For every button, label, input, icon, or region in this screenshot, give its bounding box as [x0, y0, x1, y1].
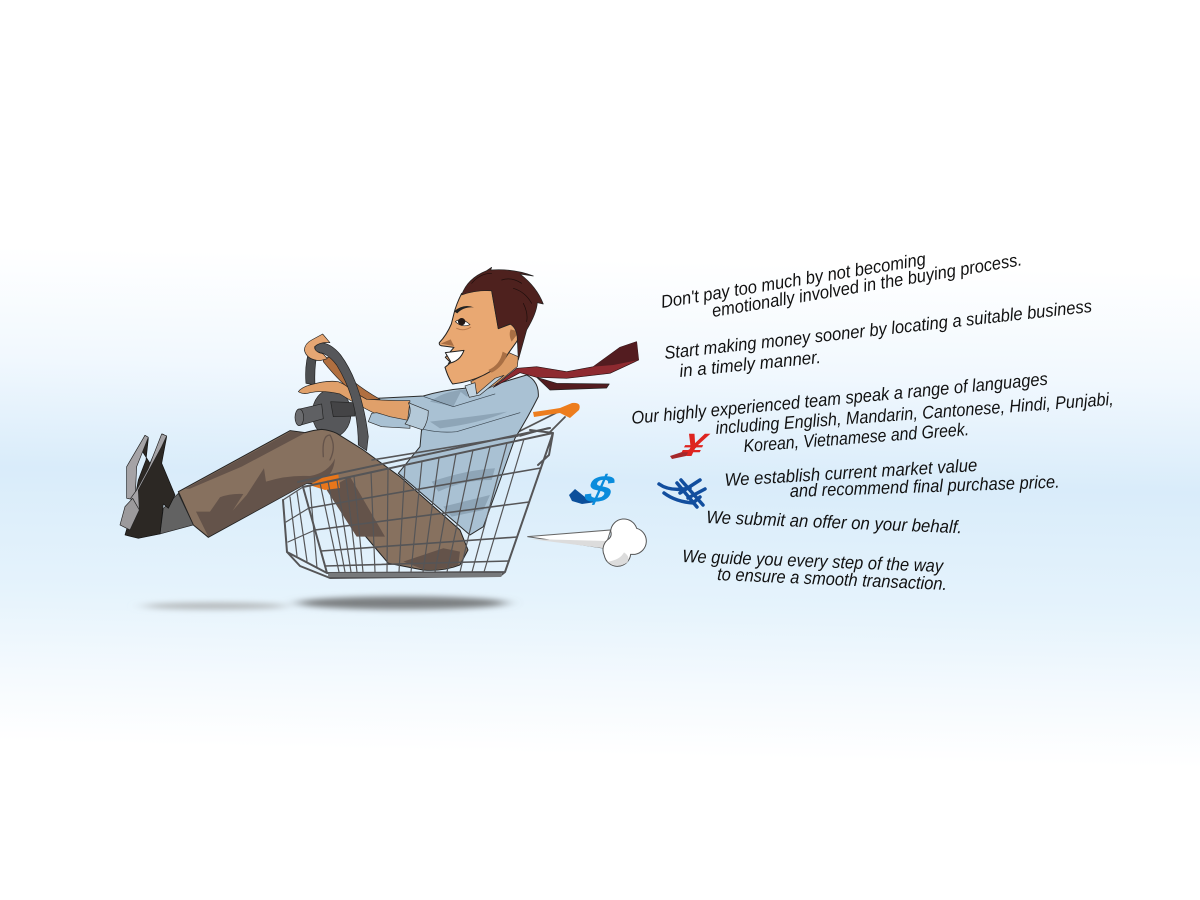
shopping cart basket — [283, 428, 553, 578]
shirt shadows — [423, 387, 520, 517]
text: languages: Our highly experienced team speak a range of languages — [630, 369, 1049, 428]
text: don't pay too much: emotionally involved in the buying process. — [710, 249, 1023, 321]
text: languages — [630, 369, 1114, 456]
neck — [471, 352, 518, 394]
eye and brow — [454, 306, 474, 330]
text: languages: Korean, Vietnamese and Greek. — [743, 419, 970, 456]
shirt cuff — [405, 403, 428, 430]
text: guide you: to ensure a smooth transaction. — [717, 564, 947, 594]
text: start making money: in a timely manner. — [678, 347, 822, 381]
arms and hands — [298, 357, 410, 428]
text: languages: including English, Mandarin, Cantonese, Hindi, Punjabi, — [715, 389, 1114, 438]
exhaust puff — [527, 519, 646, 566]
text: market value: and recommend final purchase price. — [789, 472, 1060, 501]
trousers — [178, 429, 468, 570]
text: start making money: Start making money sooner by locating a suitable business — [663, 296, 1093, 363]
text: don't pay too much: Don't pay too much by not becoming — [659, 249, 927, 312]
steering wheel rim — [315, 343, 368, 451]
speed currency: dollar: $ — [577, 469, 622, 511]
cart handle — [518, 403, 580, 432]
speed currency: blue pound-like sign — [659, 480, 705, 507]
text: submit an offer: We submit an offer on your behalf. — [706, 507, 962, 537]
upper hand — [304, 334, 330, 361]
cheek shadow and ear — [441, 329, 519, 373]
shirt torso — [377, 375, 538, 535]
face — [439, 290, 522, 384]
text: market value — [724, 455, 1060, 501]
text: market value: We establish current market value — [724, 455, 978, 490]
speed currency: yen: ¥ — [675, 427, 714, 463]
head — [439, 267, 543, 384]
necktie blowing back — [493, 342, 639, 390]
ground shadow — [143, 596, 507, 610]
hair — [462, 267, 543, 360]
text: start making money — [663, 296, 1093, 381]
collar — [465, 375, 504, 397]
shoes and socks — [120, 434, 193, 538]
orange child-seat flap — [309, 474, 340, 490]
hair strands — [472, 273, 532, 322]
text: guide you: We guide you every step of the way — [682, 546, 944, 576]
trouser shadows — [185, 432, 460, 569]
smile — [445, 350, 464, 363]
text: guide you — [682, 546, 947, 594]
steering wheel hub — [295, 348, 355, 437]
character in shopping cart — [120, 267, 639, 578]
